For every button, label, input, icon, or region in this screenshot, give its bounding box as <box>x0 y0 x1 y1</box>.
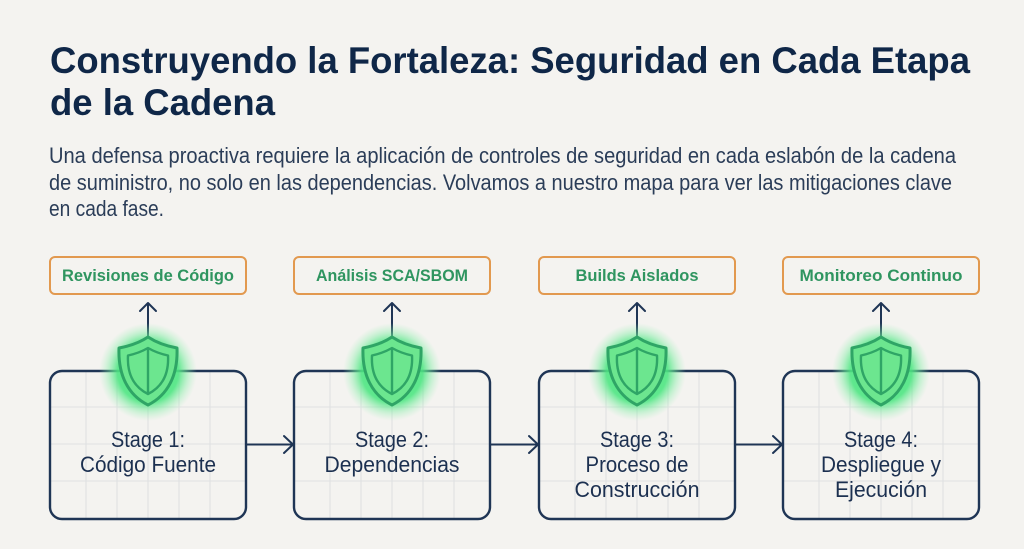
callout: Monitoreo Continuo <box>783 257 979 294</box>
intro paragraph: Una defensa proactiva requiere la aplicación de controles de seguridad en cada eslabón de la cadena <box>49 143 957 168</box>
panel: stage 4: Stage 4: <box>844 427 918 452</box>
panel: stage 1: Stage 1: <box>111 427 185 452</box>
intro paragraph: en cada fase. <box>49 196 164 221</box>
panel: stage 4 <box>783 371 979 519</box>
callout: Builds Aislados: Builds Aislados <box>576 266 698 285</box>
intro paragraph: de suministro, no solo en las dependencias. Volvamos a nuestro mapa para ver las mitigaciones clave <box>49 170 952 195</box>
icon: shield 4 <box>832 323 930 421</box>
arrow: shield 2 to control <box>384 303 400 338</box>
callout: Análisis SCA/SBOM <box>294 257 490 294</box>
panel: stage 1 <box>50 371 246 519</box>
icon: shield 1 <box>99 323 197 421</box>
panel: stage 2: Dependencias <box>324 452 460 477</box>
panel: stage 4: Despliegue y <box>821 452 941 477</box>
panel: stage 1: Código Fuente <box>80 452 216 477</box>
title <box>50 40 970 123</box>
arrow: shield 1 to control <box>140 303 156 338</box>
callout: Revisiones de Código: Revisiones de Código <box>62 266 234 285</box>
callout: Builds Aislados <box>539 257 735 294</box>
panel: stage 4: Ejecución <box>835 477 927 502</box>
title: Construyendo la Fortaleza: Seguridad en Cada Etapa <box>50 40 970 81</box>
callout: Análisis SCA/SBOM: Análisis SCA/SBOM <box>316 266 468 285</box>
panel: stage 3: Proceso de <box>586 452 688 477</box>
panel: stage 2 <box>294 371 490 519</box>
arrow: stage 3 to stage 4 <box>735 436 782 453</box>
icon: shield 2 <box>343 323 441 421</box>
panel: stage 2: Stage 2: <box>355 427 429 452</box>
arrow: shield 3 to control <box>629 303 645 338</box>
icon: shield 3 <box>588 323 686 421</box>
callout: Revisiones de Código <box>50 257 246 294</box>
title: de la Cadena <box>50 82 275 123</box>
panel: stage 3: Stage 3: <box>600 427 674 452</box>
callout: Monitoreo Continuo: Monitoreo Continuo <box>800 266 962 285</box>
arrow: shield 4 to control <box>873 303 889 338</box>
panel: stage 3: Construcción <box>574 477 700 502</box>
intro paragraph <box>49 143 957 221</box>
arrow: stage 1 to stage 2 <box>246 436 293 453</box>
panel: stage 3 <box>539 371 735 519</box>
arrow: stage 2 to stage 3 <box>490 436 538 453</box>
